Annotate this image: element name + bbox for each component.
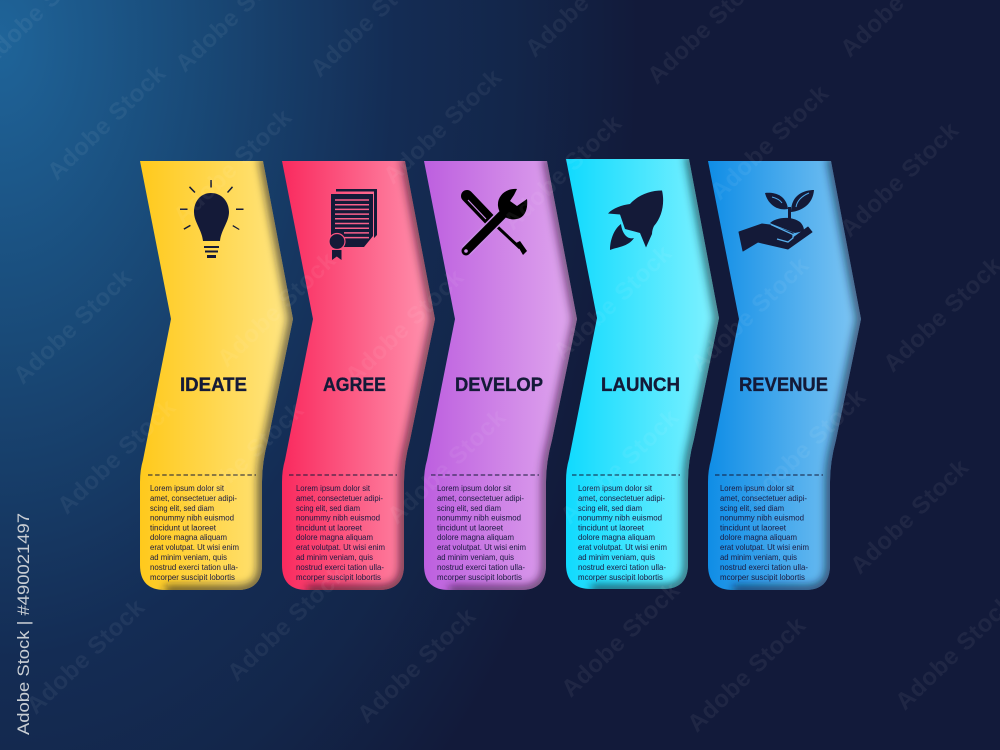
text block: revenue: amet, consectetuer adipi- [720, 493, 807, 503]
watermarks: Adobe Stock [835, 117, 964, 243]
watermarks: Adobe Stock [352, 603, 481, 729]
heading: launch: LAUNCH [601, 374, 680, 396]
stock id label: Adobe Stock | #490021497 [14, 513, 33, 735]
watermarks: Adobe Stock [555, 404, 684, 530]
text block: launch: ad minim veniam, quis [578, 552, 656, 562]
icon: wrench and screwdriver [464, 189, 527, 255]
arrow shape: yellow [140, 161, 293, 590]
text block: revenue: nonummy nibh euismod [720, 512, 804, 522]
inner edge shadow [449, 157, 577, 590]
watermarks: Adobe Stock [180, 397, 309, 523]
heading: agree: AGREE [323, 374, 386, 396]
icon: light bulb [180, 180, 244, 258]
text block: revenue: scing elit, sed diam [720, 503, 784, 513]
divider: dashed [148, 474, 256, 476]
text block: ideate: amet, consectetuer adipi- [150, 493, 237, 503]
text block: revenue [720, 483, 809, 582]
watermarks: Adobe Stock [742, 384, 871, 510]
text block: agree: ad minim veniam, quis [296, 552, 374, 562]
panel: agree [282, 157, 435, 590]
panel: develop [424, 157, 577, 590]
text block: launch: amet, consectetuer adipi- [578, 493, 665, 503]
arrow shape: purple [424, 161, 577, 590]
watermarks: Adobe Stock [340, 264, 469, 390]
watermarks: Adobe Stock [498, 110, 627, 236]
watermarks: Adobe Stock [556, 577, 685, 703]
watermarks: Adobe Stock [222, 561, 351, 687]
panel: revenue [708, 157, 861, 590]
text block: launch: Lorem ipsum dolor sit [578, 483, 653, 493]
text block: launch: scing elit, sed diam [578, 503, 642, 513]
inner edge shadow [591, 155, 719, 589]
text block: develop [437, 483, 526, 582]
inner edge shadow [165, 157, 293, 590]
text block: develop: dolore magna aliquam [437, 532, 514, 542]
text block: develop: nostrud exerci tation ulla- [437, 562, 525, 572]
text block: launch: nonummy nibh euismod [578, 512, 662, 522]
text block: develop: tincidunt ut laoreet [437, 522, 504, 532]
heading: develop: DEVELOP [455, 374, 543, 396]
text block: agree: nostrud exerci tation ulla- [296, 562, 384, 572]
text block: launch: mcorper suscipit lobortis [578, 572, 664, 582]
watermarks: Adobe Stock [682, 612, 811, 738]
icon: hand holding plant [739, 190, 814, 251]
text block: ideate: nostrud exerci tation ulla- [150, 562, 238, 572]
text block: revenue: tincidunt ut laoreet [720, 522, 787, 532]
text block: develop: scing elit, sed diam [437, 503, 501, 513]
text block: ideate: Lorem ipsum dolor sit [150, 483, 225, 493]
text block: ideate: tincidunt ut laoreet [150, 522, 217, 532]
inner edge shadow [307, 157, 435, 590]
watermarks: Adobe Stock [52, 394, 181, 520]
watermarks: Adobe Stock [548, 240, 677, 366]
heading: ideate: IDEATE [180, 374, 247, 396]
text block: ideate: nonummy nibh euismod [150, 512, 234, 522]
inner edge shadow [733, 157, 861, 590]
text block: ideate: mcorper suscipit lobortis [150, 572, 236, 582]
watermarks: Adobe Stock [8, 264, 137, 390]
divider: dashed [289, 474, 397, 476]
text block: agree [296, 483, 385, 582]
text block: launch: nostrud exerci tation ulla- [578, 562, 666, 572]
text block: agree: amet, consectetuer adipi- [296, 493, 383, 503]
text block: agree: Lorem ipsum dolor sit [296, 483, 371, 493]
text block: launch: erat volutpat. Ut wisi enim [578, 542, 667, 552]
text block: launch: tincidunt ut laoreet [578, 522, 645, 532]
text block: agree: mcorper suscipit lobortis [296, 572, 382, 582]
watermarks: Adobe Stock [382, 404, 511, 530]
watermarks: Adobe Stock [845, 454, 974, 580]
text block: revenue: dolore magna aliquam [720, 532, 797, 542]
text block: agree: scing elit, sed diam [296, 503, 360, 513]
text block: revenue: ad minim veniam, quis [720, 552, 798, 562]
text block: ideate: scing elit, sed diam [150, 503, 214, 513]
text block: ideate: ad minim veniam, quis [150, 552, 228, 562]
text block: develop: erat volutpat. Ut wisi enim [437, 542, 526, 552]
panel: ideate [140, 157, 293, 590]
watermarks: Adobe Stock [168, 104, 297, 230]
divider: dashed [431, 474, 539, 476]
text block: revenue: nostrud exerci tation ulla- [720, 562, 808, 572]
text block: launch: dolore magna aliquam [578, 532, 655, 542]
divider: dashed [715, 474, 823, 476]
watermarks: Adobe Stock [42, 60, 171, 186]
text block: revenue: Lorem ipsum dolor sit [720, 483, 795, 493]
text block: revenue: erat volutpat. Ut wisi enim [720, 542, 809, 552]
icon: rocket [608, 190, 663, 250]
text block: develop: amet, consectetuer adipi- [437, 493, 524, 503]
text block: develop: ad minim veniam, quis [437, 552, 515, 562]
text block: agree: dolore magna aliquam [296, 532, 373, 542]
text block: develop: nonummy nibh euismod [437, 512, 521, 522]
heading: revenue: REVENUE [739, 374, 828, 396]
text block: launch [578, 483, 667, 582]
text block: ideate [150, 483, 239, 582]
panel: launch [566, 155, 719, 589]
text block: ideate: erat volutpat. Ut wisi enim [150, 542, 239, 552]
watermarks: Adobe Stock [378, 64, 507, 190]
watermarks: Adobe Stock [705, 80, 834, 206]
text block: agree: erat volutpat. Ut wisi enim [296, 542, 385, 552]
text block: develop: Lorem ipsum dolor sit [437, 483, 512, 493]
arrow shape: blue [708, 161, 861, 590]
watermarks: Adobe Stock [212, 247, 341, 373]
icon: certificate document [329, 189, 377, 260]
watermarks: Adobe Stock [685, 252, 814, 378]
text block: agree: tincidunt ut laoreet [296, 522, 363, 532]
text block: develop: mcorper suscipit lobortis [437, 572, 523, 582]
arrow shape: cyan [566, 159, 719, 589]
divider: dashed [572, 474, 680, 476]
text block: revenue: mcorper suscipit lobortis [720, 572, 806, 582]
text block: ideate: dolore magna aliquam [150, 532, 227, 542]
arrow shape: red [282, 161, 435, 590]
text block: agree: nonummy nibh euismod [296, 512, 380, 522]
watermarks: Adobe Stock [21, 594, 150, 720]
